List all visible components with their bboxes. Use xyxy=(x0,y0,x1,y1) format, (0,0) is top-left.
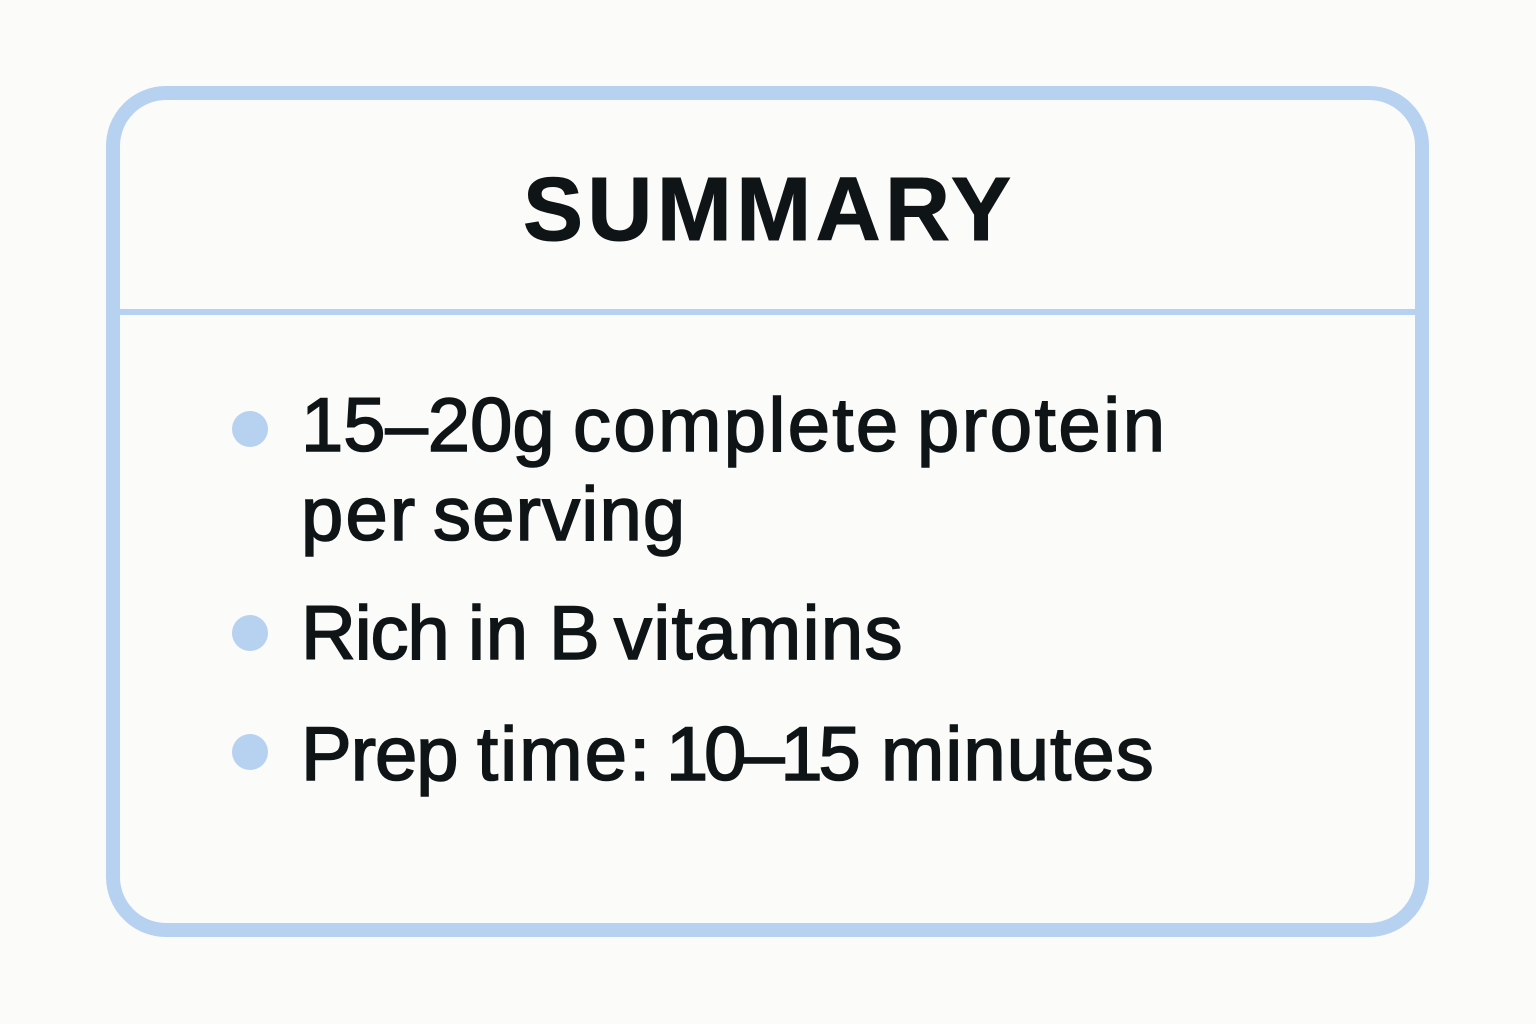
bullet icon 3 xyxy=(232,734,268,770)
text: B vitamins: in xyxy=(468,591,529,676)
text: prep time: Prep xyxy=(301,712,458,797)
text: protein line: per xyxy=(301,472,417,557)
text: protein line: complete xyxy=(573,383,901,468)
text: prep time: minutes xyxy=(881,712,1155,797)
text: prep time xyxy=(301,712,1155,797)
divider under heading xyxy=(120,309,1416,315)
text: B vitamins: Rich xyxy=(301,591,448,676)
bullet icon 1 xyxy=(232,411,268,447)
text: protein line xyxy=(301,383,1168,557)
text: prep time: time: xyxy=(477,712,652,797)
bullet list xyxy=(232,383,1168,797)
panel: summary card xyxy=(106,86,1429,937)
text: protein line: 15–20g xyxy=(301,383,555,468)
text: B vitamins xyxy=(301,591,904,676)
text: B vitamins: B xyxy=(549,591,600,676)
text: protein line: serving xyxy=(433,472,686,557)
text: prep time: 10–15 xyxy=(666,712,857,797)
heading: SUMMARY: SUMMARY xyxy=(523,160,1015,260)
bullet icon 2 xyxy=(232,615,268,651)
text: B vitamins: vitamins xyxy=(614,591,904,676)
text: protein line: protein xyxy=(917,383,1168,468)
